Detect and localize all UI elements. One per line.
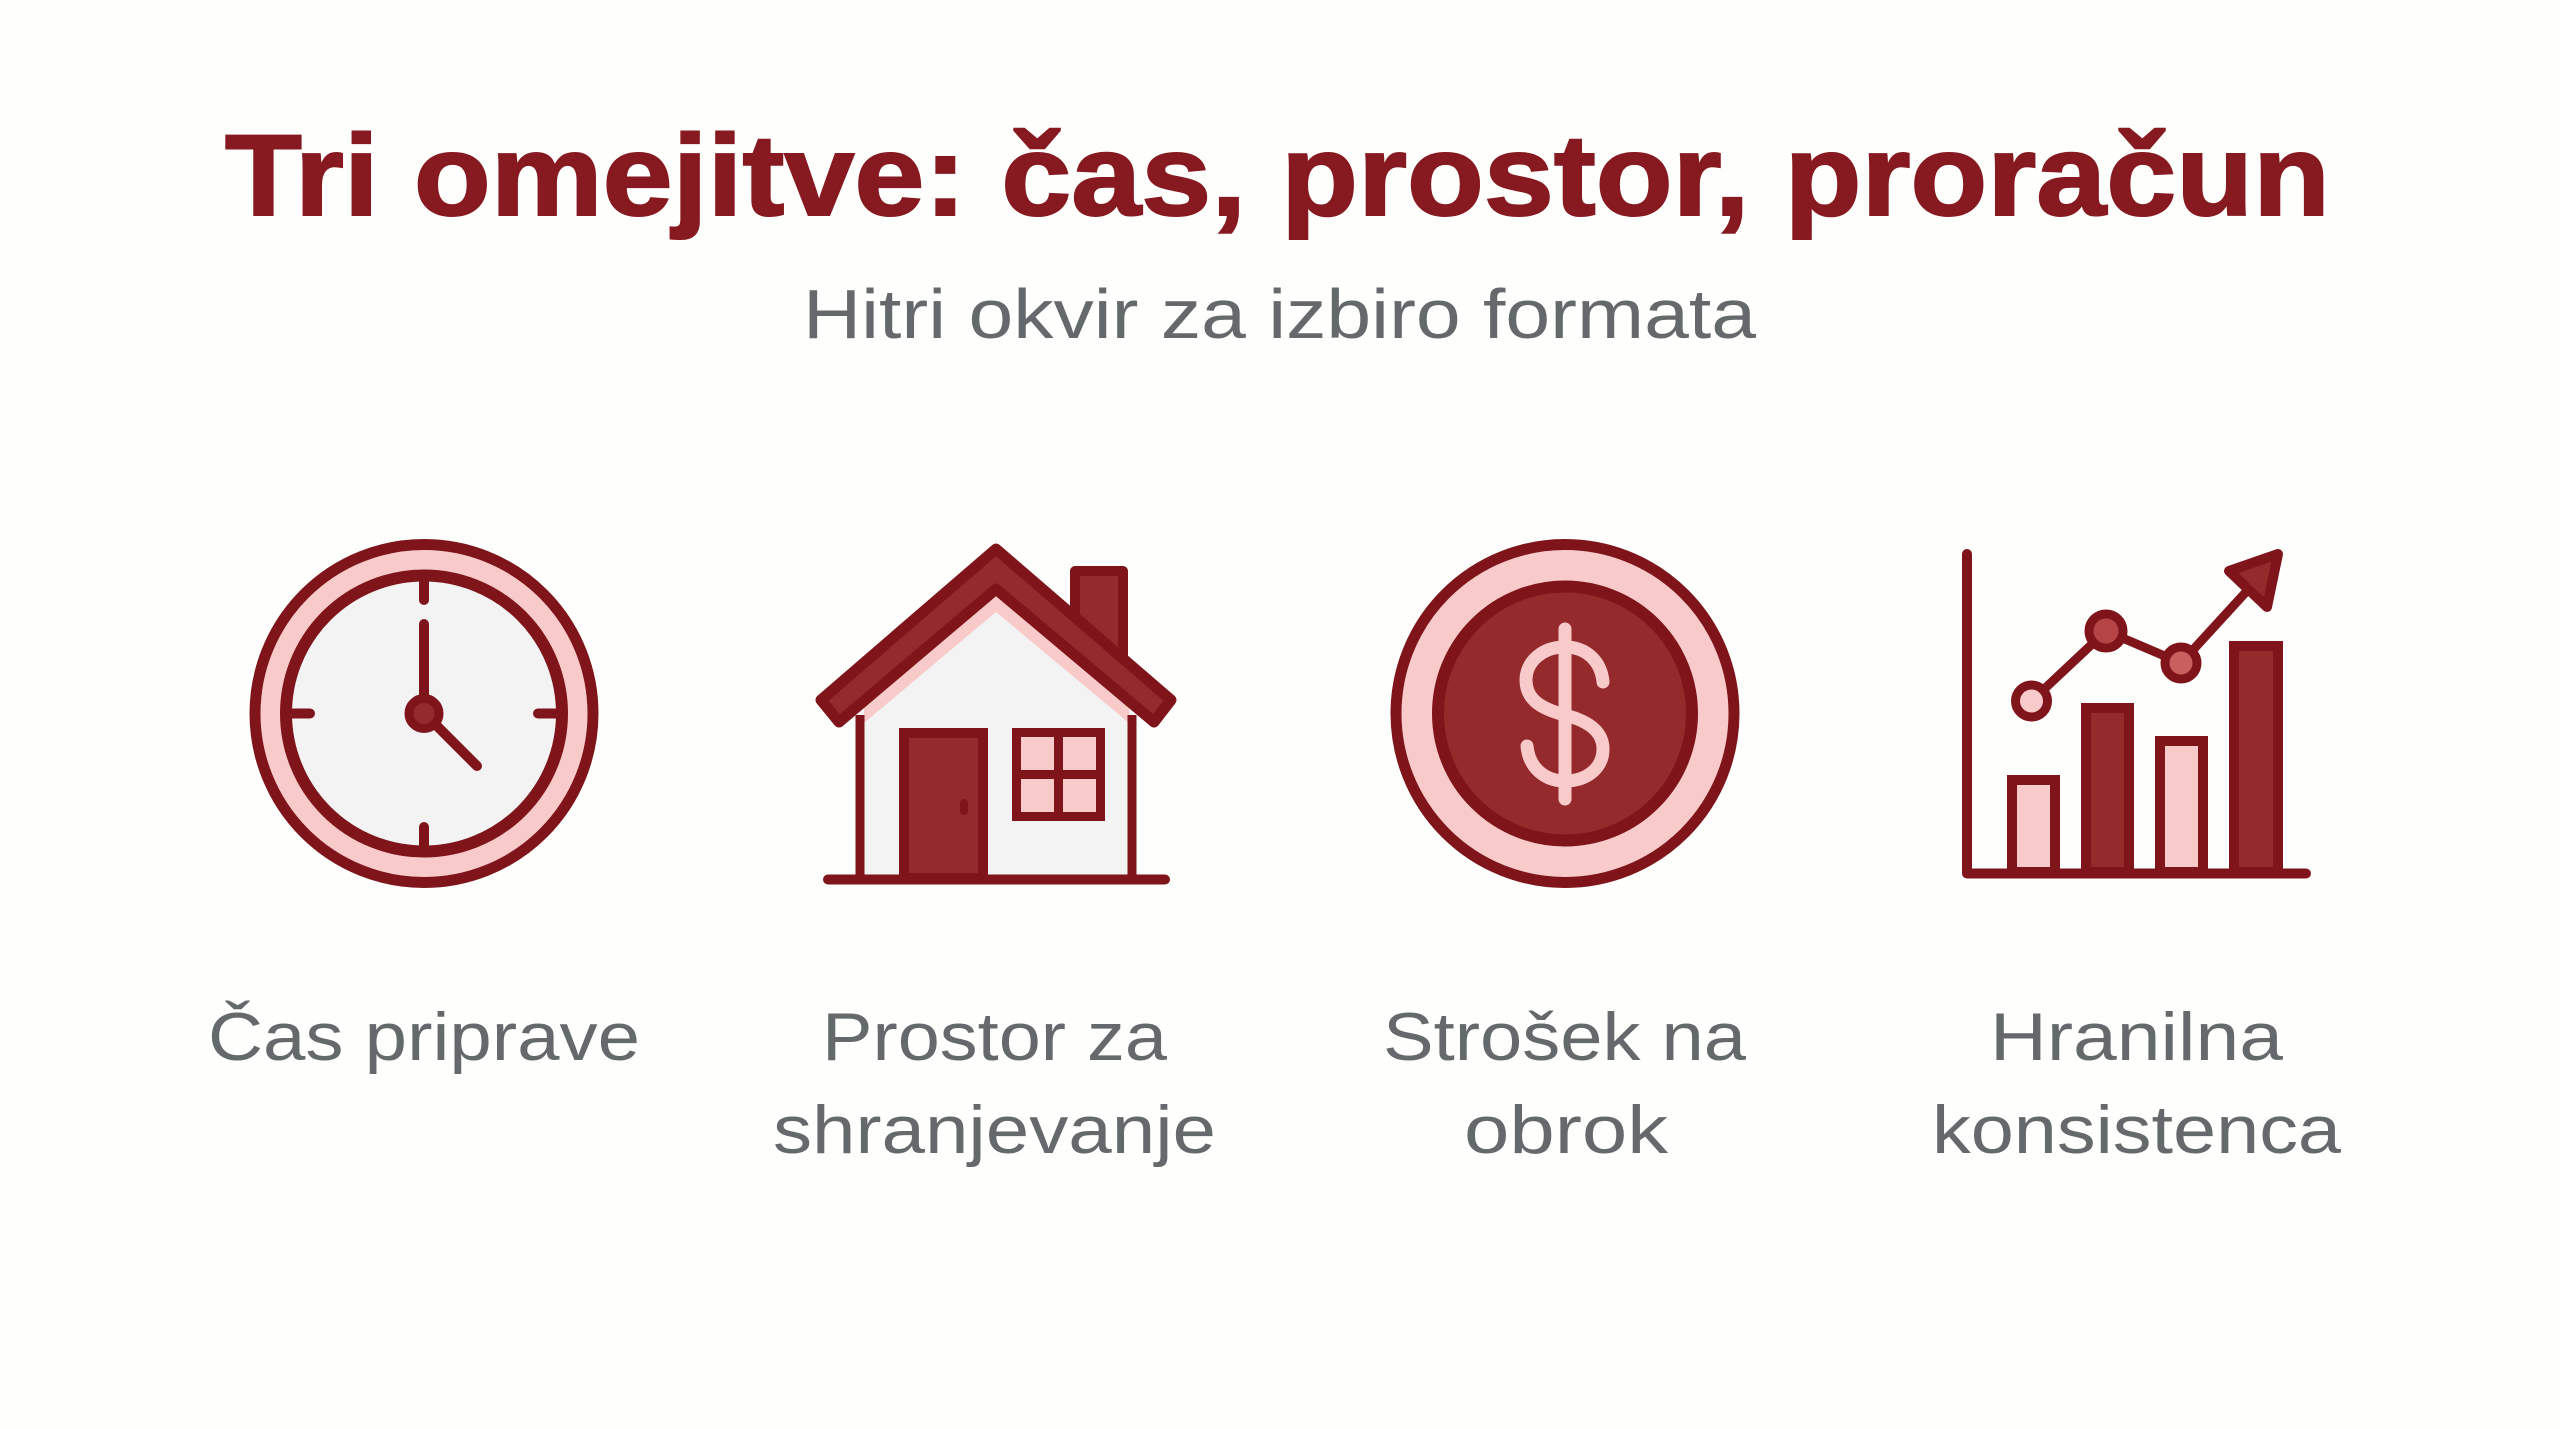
label: cost per meal: obrok xyxy=(1464,1092,1669,1168)
label: cost per meal: Strošek na xyxy=(1383,999,1746,1075)
window xyxy=(1016,732,1100,816)
subtitle: Hitri okvir za izbiro formata xyxy=(803,275,1756,353)
chimney xyxy=(1075,571,1123,680)
label: nutritional consistency xyxy=(1932,999,2341,1168)
data points xyxy=(2016,685,2048,717)
arrowhead xyxy=(2229,554,2278,607)
bars xyxy=(2012,780,2055,872)
label: preparation time: Čas priprave xyxy=(208,999,640,1075)
label: storage space: shranjevanje xyxy=(773,1092,1216,1168)
title: Tri omejitve: čas, prostor, proračun xyxy=(225,112,2330,240)
trend line xyxy=(2032,592,2246,701)
icon: dollar coin xyxy=(1396,544,1734,882)
pink band under roof xyxy=(864,585,1129,723)
label: nutritional consistency: konsistenca xyxy=(1932,1092,2341,1168)
axes xyxy=(1967,554,2306,874)
label: storage space: Prostor za xyxy=(822,999,1167,1075)
icon: house xyxy=(821,549,1171,880)
label: storage space xyxy=(773,999,1216,1168)
icon: clock xyxy=(255,544,593,882)
ground xyxy=(828,874,1165,884)
roof xyxy=(821,549,1171,722)
label: cost per meal xyxy=(1383,999,1746,1168)
icon: bar and line chart xyxy=(1967,554,2306,874)
walls xyxy=(860,590,1132,880)
label: nutritional consistency: Hranilna xyxy=(1990,999,2283,1075)
door xyxy=(904,733,983,878)
